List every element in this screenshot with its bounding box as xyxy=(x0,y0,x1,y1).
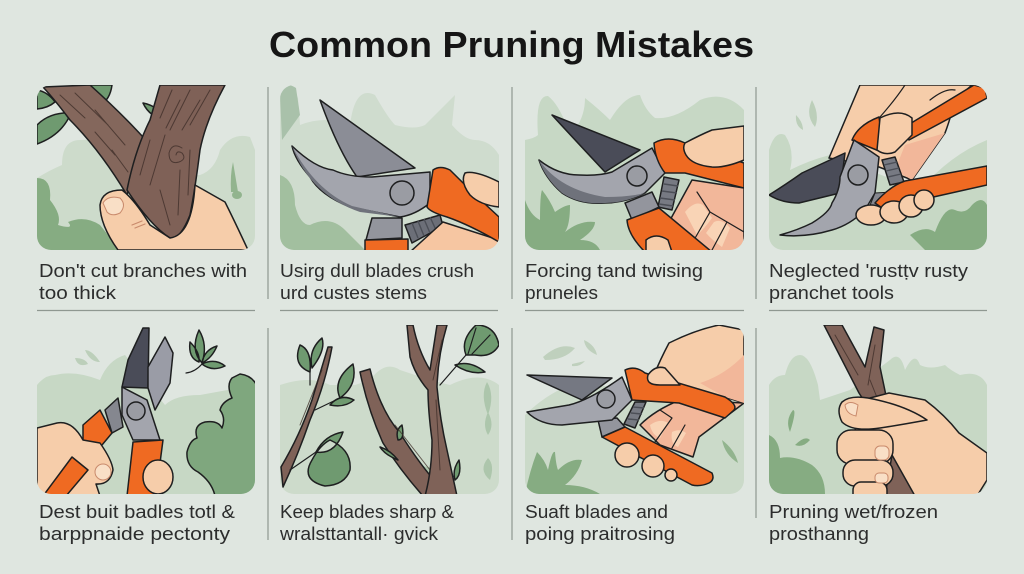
spring coil xyxy=(658,177,679,210)
upper orange handle xyxy=(903,85,987,140)
panel: keep blades sharp xyxy=(279,325,499,544)
thumb xyxy=(648,367,680,385)
hand gripping branch xyxy=(100,185,248,250)
leaves xyxy=(290,325,499,486)
caption: prosthanng xyxy=(769,523,869,544)
hand xyxy=(37,423,113,496)
right orange handle xyxy=(127,440,163,496)
illustration: open pruners with leafy bush xyxy=(37,328,258,496)
light blade xyxy=(148,337,173,410)
caption: urd custes stems xyxy=(280,282,427,303)
caption: wralsttantall· gvick xyxy=(279,523,439,544)
caption xyxy=(280,260,474,303)
spring coil xyxy=(882,157,904,185)
caption: Pruning wet/frozen xyxy=(769,501,938,522)
grey head xyxy=(122,387,160,440)
spring coil xyxy=(405,215,443,243)
palm and fingers xyxy=(669,180,744,252)
palm xyxy=(640,400,744,457)
forked branch xyxy=(824,325,889,410)
lower arm xyxy=(598,418,625,437)
lower orange handle strip xyxy=(43,457,88,496)
title: Common Pruning Mistakes xyxy=(269,24,754,65)
caption: Neglected 'rustṭv rusty xyxy=(769,260,969,281)
caption: Don't cut branches with xyxy=(39,260,247,281)
falling leaf sprig xyxy=(186,330,225,373)
dark blade xyxy=(122,328,149,388)
curved lower blade xyxy=(292,146,430,217)
thumb xyxy=(839,397,927,429)
top blade xyxy=(527,375,612,400)
spring coil xyxy=(624,402,646,428)
bush xyxy=(187,374,258,496)
top orange handle xyxy=(625,368,735,418)
dark blade xyxy=(769,153,845,203)
lower orange handle xyxy=(602,427,713,486)
main trunk xyxy=(127,85,225,238)
branch cut left xyxy=(281,347,332,487)
hand on top xyxy=(654,325,744,403)
thumb xyxy=(684,126,744,167)
caption xyxy=(39,260,247,303)
lower orange handle xyxy=(627,208,712,252)
head orange cap xyxy=(852,117,884,153)
illustration: pruned branches with leaves xyxy=(280,325,499,496)
orange handle xyxy=(427,168,499,242)
thumb finger xyxy=(877,113,912,154)
illustration: hand gripping forked branch xyxy=(769,325,987,502)
branch below grip xyxy=(885,455,915,496)
right forked trunk xyxy=(407,325,457,496)
lower arm xyxy=(625,192,659,220)
leaves xyxy=(37,85,166,144)
illustration: pruners gripped from above xyxy=(769,85,987,250)
hand from above xyxy=(829,85,972,180)
caption: barppnaide pectonty xyxy=(39,523,231,544)
finger xyxy=(463,172,499,207)
caption xyxy=(769,501,938,544)
dark blade xyxy=(552,115,640,172)
top blade xyxy=(320,100,415,177)
caption: Keep blades sharp & xyxy=(280,501,455,522)
illustration: horizontal pruners in hand xyxy=(525,325,744,494)
panel: blades and safety xyxy=(37,328,258,544)
illustration: thick branch held in hand xyxy=(37,85,255,250)
caption: Forcing tand twising xyxy=(525,260,703,281)
caption: Dest buit badles totl & xyxy=(39,501,236,522)
branch cut middle xyxy=(360,369,457,496)
top orange handle xyxy=(654,139,744,188)
pivot bolt xyxy=(627,166,647,186)
curved blade xyxy=(527,377,632,425)
caption: Suaft blades and xyxy=(525,501,668,522)
panel: forcing and twisting xyxy=(525,95,744,303)
left orange handle xyxy=(83,410,112,445)
grey head and curved blade xyxy=(780,140,879,236)
pivot bolt xyxy=(597,390,615,408)
caption xyxy=(769,260,969,303)
fingers xyxy=(856,190,934,225)
panel: soft blades and poor posture xyxy=(525,325,744,544)
caption xyxy=(279,501,455,544)
caption: pranchet tools xyxy=(769,282,894,303)
right thumb xyxy=(143,460,173,494)
fingers xyxy=(615,443,677,481)
pivot bolt xyxy=(127,402,145,420)
caption: too thick xyxy=(39,282,117,303)
caption xyxy=(525,260,703,303)
pivot bolt xyxy=(390,181,414,205)
caption: poing praitrosing xyxy=(525,523,675,544)
illustration: pruners forced with twisting grip xyxy=(525,95,744,252)
caption: pruneles xyxy=(525,282,598,303)
curved blade xyxy=(539,148,665,203)
caption: Usirg dull blades crush xyxy=(280,260,474,281)
fingers xyxy=(837,430,893,502)
pivot bolt xyxy=(848,165,868,185)
panel: don't cut branches too thick xyxy=(37,85,255,303)
panel: pruning wet or frozen xyxy=(769,325,987,544)
lower pivot arm xyxy=(366,218,402,240)
caption xyxy=(39,501,236,544)
left branch xyxy=(43,85,143,195)
palm xyxy=(410,222,499,252)
panel: dull blades xyxy=(280,85,499,303)
panel: neglected rusty tools xyxy=(769,85,987,303)
lower orange handle xyxy=(875,166,987,210)
caption xyxy=(525,501,675,544)
palm xyxy=(855,393,987,496)
illustration: bypass pruners with dull blades xyxy=(280,85,499,252)
